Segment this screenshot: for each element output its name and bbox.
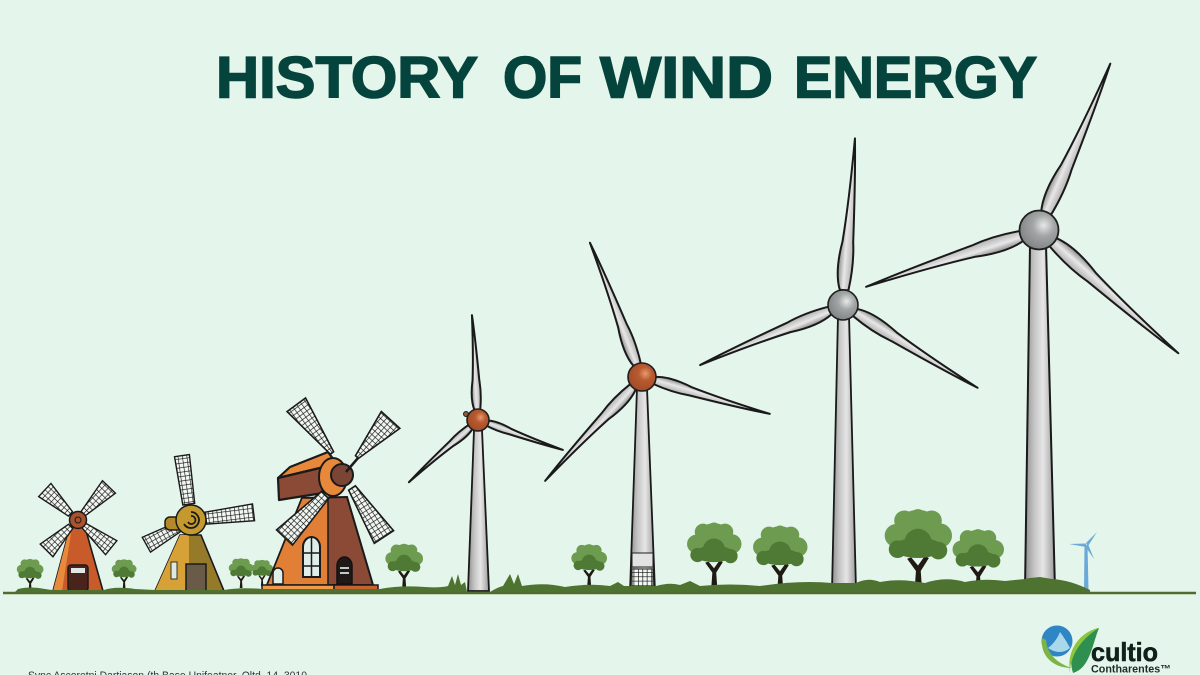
title (216, 46, 1037, 110)
mill cap (165, 505, 206, 535)
blades (541, 241, 772, 485)
mill body (267, 497, 373, 585)
mill sails (142, 455, 255, 552)
hub (628, 363, 656, 391)
ground with grass (3, 574, 1196, 593)
tree 3 (251, 560, 273, 586)
tree 4 (229, 558, 254, 588)
mill door (337, 557, 352, 584)
hub (1020, 210, 1058, 250)
mill body (53, 527, 103, 591)
tree 2 (112, 559, 136, 589)
mill window (171, 562, 177, 579)
mill window (303, 537, 320, 577)
tree 8 (753, 526, 808, 591)
windmill 2: ochre (142, 455, 255, 592)
mill sails (39, 481, 117, 557)
tree 6 (571, 544, 607, 587)
mill hub (319, 458, 358, 496)
title: WIND (600, 46, 773, 110)
blades (864, 60, 1184, 359)
windmill 1: red-orange (39, 481, 117, 591)
tower (630, 388, 655, 592)
small blue turbine (1069, 532, 1097, 590)
mill cap (278, 452, 334, 500)
blades (406, 315, 564, 485)
windmill 3: large orange and brown (262, 398, 400, 593)
tree 7 (687, 523, 742, 588)
blades (698, 138, 981, 393)
title: OF (503, 46, 582, 110)
tower base door (632, 553, 653, 593)
mill door (68, 565, 88, 591)
tower (468, 430, 489, 591)
tree 5 (385, 544, 423, 589)
tree 1 (17, 559, 44, 591)
trees (17, 509, 1004, 591)
small window (273, 568, 283, 584)
title: ENERGY (794, 46, 1037, 110)
turbine 2 (541, 241, 772, 593)
tower (1025, 245, 1055, 590)
turbine 4 (864, 60, 1184, 590)
logo icon (1042, 626, 1099, 673)
logo wordmark: cultio (1091, 637, 1158, 667)
title: HISTORY (216, 46, 478, 110)
mill base (262, 585, 378, 593)
mill door (186, 564, 206, 592)
logo (1042, 626, 1171, 675)
turbine 1 (406, 315, 564, 591)
tower (832, 315, 856, 590)
tree 10 (953, 529, 1004, 591)
mill body (155, 535, 224, 591)
hub (828, 290, 858, 320)
mill sails (277, 398, 400, 545)
mill hub (70, 512, 86, 528)
hub (464, 409, 489, 431)
turbine 3 (698, 138, 981, 590)
tree 9 (885, 509, 952, 590)
